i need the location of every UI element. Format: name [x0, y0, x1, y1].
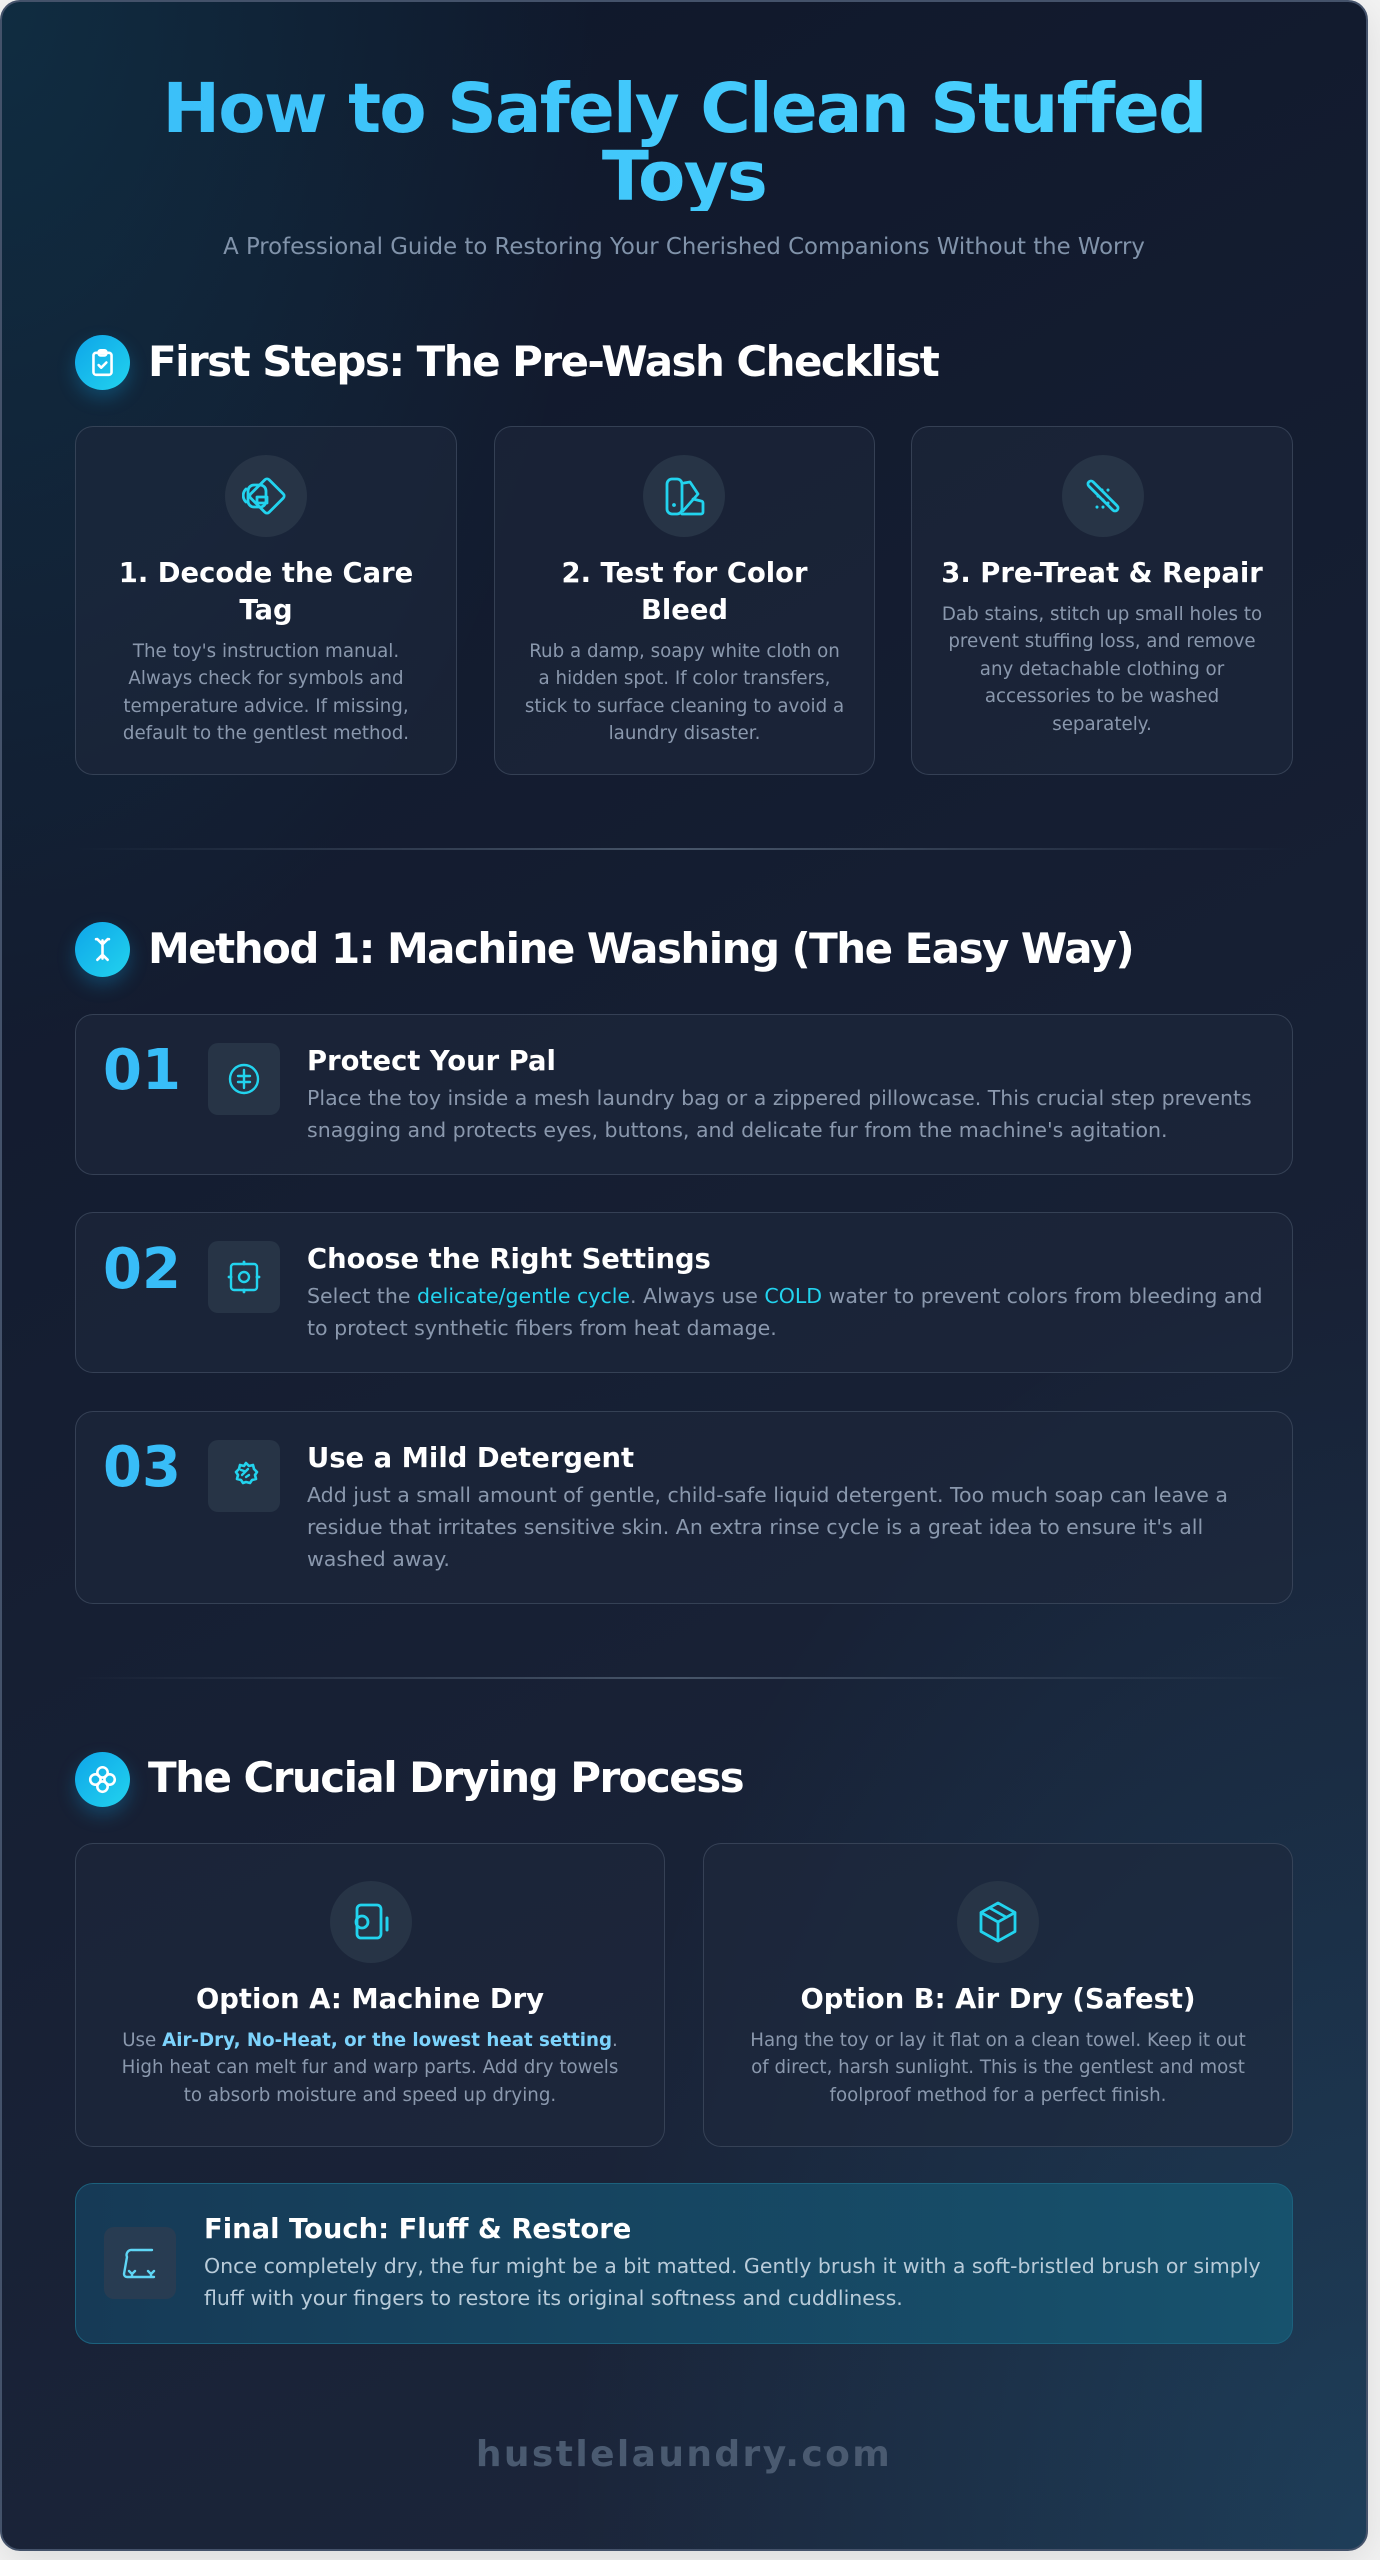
- panel: step 2: [75, 1212, 1293, 1373]
- panel: step 3: [75, 1411, 1293, 1604]
- card text: [525, 641, 844, 744]
- icon: brush: [104, 2227, 176, 2299]
- card title: 1. Decode the Care: [119, 558, 413, 588]
- card text: any detachable clothing or: [980, 659, 1224, 680]
- card title: Tag: [239, 594, 293, 626]
- step title: Choose the Right Settings: [307, 1244, 711, 1275]
- step text: [307, 1483, 1228, 1571]
- card text: accessories to be washed: [985, 686, 1219, 707]
- option text: to absorb moisture and speed up drying.: [184, 2085, 556, 2106]
- icon: detergent: [208, 1440, 280, 1512]
- card text: prevent stuffing loss, and remove: [948, 631, 1256, 652]
- card text: Rub a damp, soapy white cloth on: [529, 641, 840, 662]
- heading: method 1: Method 1: Machine Washing (The Easy Way): [148, 924, 1133, 972]
- step text: Select the delicate/gentle cycle. Always use COLD water to prevent colors from bleeding and: [307, 1284, 1262, 1308]
- title: How to Safely Clean Stuffed: [162, 69, 1206, 149]
- step title: Protect Your Pal: [307, 1046, 556, 1077]
- callout text: Once completely dry, the fur might be a bit matted. Gently brush it with a soft-bristled brush or simply: [204, 2254, 1261, 2278]
- step text: washed away.: [307, 1547, 450, 1571]
- heading: first steps: First Steps: The Pre-Wash Checklist: [148, 336, 938, 386]
- option text: foolproof method for a perfect finish.: [830, 2085, 1166, 2106]
- icon: mesh bag: [208, 1043, 280, 1115]
- card text: separately.: [1052, 714, 1152, 735]
- panel: step 1: [75, 1014, 1293, 1175]
- step number: 02: [103, 1237, 181, 1302]
- option text: Hang the toy or lay it flat on a clean towel. Keep it out: [750, 2030, 1246, 2051]
- icon: washing method: [75, 922, 130, 977]
- card text: a hidden spot. If color transfers,: [539, 668, 830, 689]
- option text: of direct, harsh sunlight. This is the gentlest and most: [751, 2057, 1245, 2078]
- card text: Dab stains, stitch up small holes to: [942, 604, 1262, 625]
- step text: [307, 1086, 1252, 1142]
- heading: drying: The Crucial Drying Process: [148, 1752, 743, 1802]
- step text: [307, 1284, 1262, 1340]
- title: Toys: [602, 137, 766, 217]
- card title: Bleed: [641, 594, 728, 626]
- callout title: Final Touch: Fluff & Restore: [204, 2214, 631, 2245]
- icon: box: [957, 1881, 1039, 1963]
- step title: Use a Mild Detergent: [307, 1443, 634, 1474]
- step text: to protect synthetic fibers from heat damage.: [307, 1316, 777, 1340]
- card title: 3. Pre-Treat & Repair: [941, 558, 1263, 588]
- callout text: [204, 2254, 1261, 2310]
- option title: Option B: Air Dry (Safest): [800, 1984, 1196, 2015]
- icon: tags: [225, 455, 307, 537]
- step text: Add just a small amount of gentle, child-safe liquid detergent. Too much soap can leave a: [307, 1483, 1228, 1507]
- card title: [562, 558, 808, 626]
- card text: [123, 641, 409, 744]
- title: [0, 75, 1368, 211]
- step number: 03: [103, 1435, 181, 1500]
- callout: final touch: [75, 2183, 1293, 2344]
- panel: pre-treat: [911, 426, 1293, 775]
- card text: temperature advice. If missing,: [123, 696, 409, 717]
- icon: settings dial: [208, 1241, 280, 1313]
- icon: drying flower: [75, 1752, 130, 1807]
- step text: snagging and protects eyes, buttons, and delicate fur from the machine's agitation.: [307, 1118, 1168, 1142]
- option title: Option A: Machine Dry: [196, 1984, 544, 2015]
- option text: Use Air-Dry, No-Heat, or the lowest heat setting.: [122, 2030, 618, 2051]
- icon: swatches: [643, 455, 725, 537]
- card text: [942, 604, 1262, 735]
- icon: dryer: [330, 1881, 412, 1963]
- card text: Always check for symbols and: [128, 668, 404, 689]
- panel: color bleed: [494, 426, 875, 775]
- subtitle: A Professional Guide to Restoring Your Cherished Companions Without the Worry: [223, 234, 1145, 260]
- card text: default to the gentlest method.: [123, 723, 409, 744]
- card title: 2. Test for Color: [562, 558, 807, 588]
- step text: Place the toy inside a mesh laundry bag or a zippered pillowcase. This crucial step prevents: [307, 1086, 1252, 1110]
- option text: [750, 2030, 1246, 2106]
- option text: High heat can melt fur and warp parts. Add dry towels: [122, 2057, 618, 2078]
- icon: needle and stains: [1062, 455, 1144, 537]
- card text: The toy's instruction manual.: [133, 641, 399, 662]
- footer brand: hustlelaundry.com: [476, 2434, 892, 2475]
- panel: option B: [703, 1843, 1293, 2147]
- callout text: fluff with your fingers to restore its original softness and cuddliness.: [204, 2286, 903, 2310]
- panel: care tag: [75, 426, 457, 775]
- option text: [122, 2030, 618, 2106]
- panel: option A: [75, 1843, 665, 2147]
- card text: stick to surface cleaning to avoid a: [525, 696, 844, 717]
- step text: residue that irritates sensitive skin. An extra rinse cycle is a great idea to ensure it's all: [307, 1515, 1203, 1539]
- card text: laundry disaster.: [609, 723, 760, 744]
- step number: 01: [103, 1038, 181, 1103]
- icon: clipboard check: [75, 335, 130, 390]
- card title: [119, 558, 413, 626]
